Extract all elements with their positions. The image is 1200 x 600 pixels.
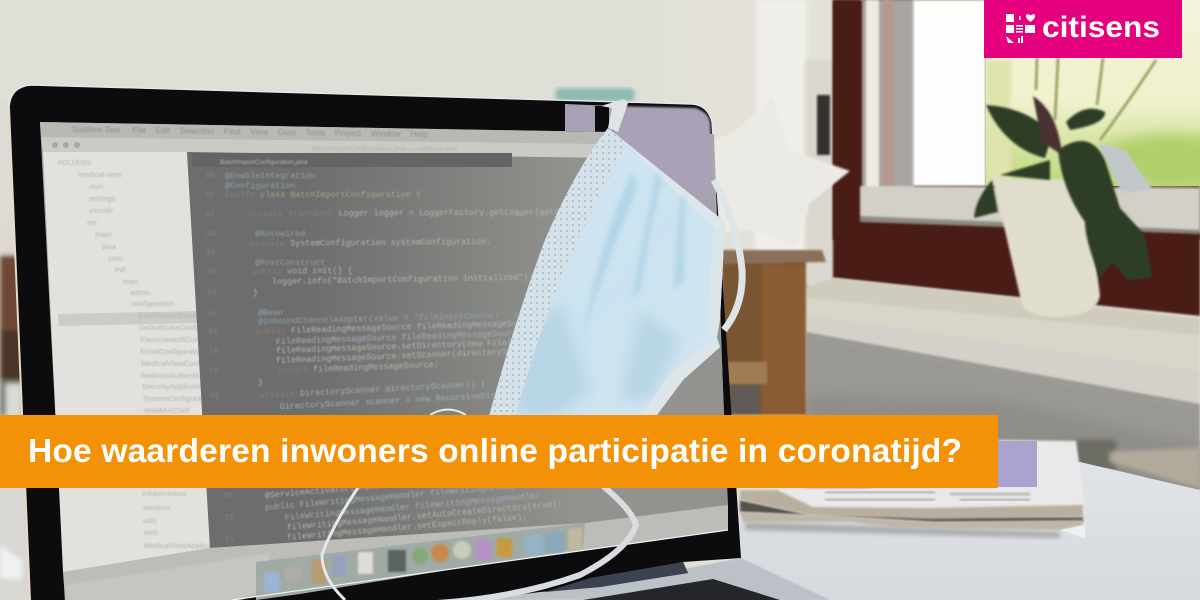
sidebar file tree: admin	[130, 288, 151, 297]
sidebar file tree: com	[108, 254, 122, 263]
logo wordmark: citisens	[1042, 11, 1160, 44]
sidebar file tree: .settings	[87, 194, 115, 203]
menu bar: Sublime Text File Edit Selection Find View Goto Tools Project Window Help	[72, 124, 428, 139]
face mask	[322, 99, 742, 600]
title bar: BatchImportConfiguration.java — medical-view	[312, 146, 458, 153]
title bar	[41, 137, 612, 158]
window sill and lower wall	[806, 278, 1200, 600]
lower wall shade	[806, 395, 1200, 490]
top pleated band	[608, 128, 725, 236]
sidebar file tree: services	[143, 503, 171, 512]
code text: @Configuration	[225, 181, 295, 191]
code text: public class BatchImportConfiguration {	[225, 190, 421, 200]
code text: }	[258, 378, 263, 388]
citisens logo	[984, 0, 1182, 58]
code text: logger.info("BatchImportConfiguration initialized");	[272, 272, 533, 287]
laptop screen	[40, 104, 728, 600]
sidebar file tree	[58, 160, 216, 550]
code text: fileWritingMessageHandler.setExpectReply(false);	[286, 512, 528, 543]
line numbers: 54	[208, 328, 218, 337]
code text: @Autowired	[255, 229, 305, 239]
code text: fileReadingMessageSource.setDirectory(new File(syst	[276, 337, 532, 356]
sidebar file tree: SystemConfiguration	[143, 394, 214, 403]
sidebar panel	[43, 152, 210, 572]
code text: }	[253, 288, 258, 298]
dock icons	[264, 528, 582, 592]
lower loop right strap	[420, 486, 636, 600]
code text: BatchImportConfiguration.java	[220, 159, 308, 166]
code text: @ServiceActivator(inputChannel = "fileInputChannel")	[264, 468, 526, 501]
logo icon grid	[1006, 14, 1035, 43]
code text: private SystemConfiguration systemConfiguration;	[250, 237, 491, 249]
sidebar file tree: configuration	[131, 299, 174, 308]
sidebar file tree: WebMvcConf	[144, 406, 190, 415]
line numbers: 38	[205, 172, 215, 181]
line numbers: 60	[210, 392, 220, 401]
code text: fileWritingMessageHandler.setAutoCreateDirectory(true);	[286, 499, 563, 533]
laptop silver rim	[9, 85, 716, 180]
screen base colour	[40, 122, 728, 600]
sidebar file tree: FOLDERS	[58, 160, 91, 167]
sidebar file tree: SecurityApplication	[142, 382, 207, 391]
laptop base and keyboard	[470, 558, 830, 600]
code editor panel	[187, 152, 728, 548]
code text: private transient Logger logger = LoggerFactory.getLogger(getClass());	[248, 207, 600, 219]
code text: @EnableIntegration	[225, 171, 315, 181]
line numbers: 44	[206, 230, 216, 239]
sidebar file tree: infrastructure	[142, 489, 186, 498]
window with view outside	[833, 0, 1200, 316]
line numbers: 42	[205, 210, 215, 219]
sidebar file tree: EmailConfiguration	[140, 347, 204, 356]
code text: DirectoryScanner scanner = new RecursiveDirectoryScanner	[280, 387, 561, 412]
line numbers: 70	[223, 492, 233, 501]
mask lower right band	[640, 338, 720, 415]
sidebar file tree: ElasticsearchConfig	[140, 335, 207, 344]
code text: @InboundChannelAdapter(value = "fileInputChannel", poller	[258, 310, 544, 327]
sidebar selected row	[58, 311, 197, 326]
line numbers: 72	[224, 514, 234, 523]
sidebar file tree: web	[143, 528, 158, 537]
sidebar file tree: src	[87, 218, 97, 227]
line numbers	[205, 172, 235, 545]
laptop left edge highlight	[9, 108, 30, 600]
line numbers: 58	[209, 367, 219, 376]
line numbers: 40	[205, 191, 215, 200]
plant stems	[1036, 58, 1156, 140]
table surface	[740, 462, 1200, 600]
sidebar file tree: medical-view	[78, 170, 122, 179]
lower loop left strap	[322, 486, 359, 600]
dotted left band	[488, 128, 626, 420]
plant leaves	[974, 96, 1153, 280]
right ear strap	[714, 180, 742, 330]
top right reflection strip	[565, 104, 612, 132]
newspaper	[740, 440, 1085, 538]
code text: public FileReadingMessageSource fileReadingMessageSource(	[256, 318, 542, 337]
sidebar file tree: man	[123, 277, 138, 286]
code text: private DirectoryScanner directoryScanner() {	[260, 379, 486, 401]
line numbers: 74	[225, 536, 235, 545]
line numbers: 56	[209, 347, 219, 356]
line numbers: 50	[207, 289, 217, 298]
line numbers: 46	[206, 249, 216, 258]
sidebar file tree: DefaultDataConfig	[139, 323, 201, 332]
sidebar file tree: ind	[115, 265, 125, 274]
menu bar	[40, 122, 612, 144]
star decoration	[712, 97, 850, 247]
wallpaper below the windows	[63, 505, 728, 600]
code text: return fileReadingMessageSource;	[278, 360, 439, 376]
background behind newspaper	[1076, 440, 1200, 488]
code tabs	[192, 153, 512, 167]
mask body	[488, 128, 725, 420]
code text: public void init() {	[252, 266, 353, 277]
orange title band	[0, 415, 998, 488]
code text: @Bean	[258, 308, 283, 318]
mask pleat shadows	[582, 170, 685, 340]
code text: public FileWritingMessageHandler fileWritingMessageHandler	[264, 478, 556, 513]
purple window reflection	[612, 106, 716, 225]
sidebar file tree: .vscode	[87, 206, 113, 215]
sidebar file tree: java	[101, 242, 117, 251]
code text: @PostConstruct	[255, 258, 325, 268]
laptop lid bezel	[9, 85, 741, 600]
code text: fileReadingMessageSource.setScanner(directoryScann	[276, 346, 527, 366]
sidebar file tree: .mvn	[87, 182, 103, 191]
code text: FileWritingMessageHandler fileWritingMessageHandler	[284, 491, 541, 523]
sidebar file tree: utils	[143, 516, 157, 525]
sidebar file tree: MedicalViewConfig	[141, 359, 205, 368]
sidebar file tree: BatchImportConfig	[138, 311, 201, 320]
line numbers: 48	[207, 268, 217, 277]
sidebar file tree: MedicalViewApplicati	[144, 541, 216, 550]
sidebar file tree: main	[95, 230, 111, 239]
code text: FileReadingMessageSource fileReadingMessageSource	[276, 328, 522, 347]
laptop hinge	[545, 562, 688, 592]
screen lower edge highlight	[232, 530, 728, 600]
top ear strap	[601, 99, 628, 132]
code text	[220, 159, 600, 543]
title: Hoe waarderen inwoners online participatie in coronatijd?	[28, 433, 962, 470]
loop top	[430, 410, 466, 415]
left background objects	[0, 230, 32, 600]
line numbers: 52	[208, 309, 218, 318]
mask right band	[707, 222, 725, 337]
wooden side table	[718, 250, 826, 415]
blue shading	[515, 300, 680, 415]
sidebar file tree: RedirectAuthentic	[141, 371, 201, 380]
black reflection notch	[595, 106, 609, 134]
plant pot	[993, 178, 1100, 317]
